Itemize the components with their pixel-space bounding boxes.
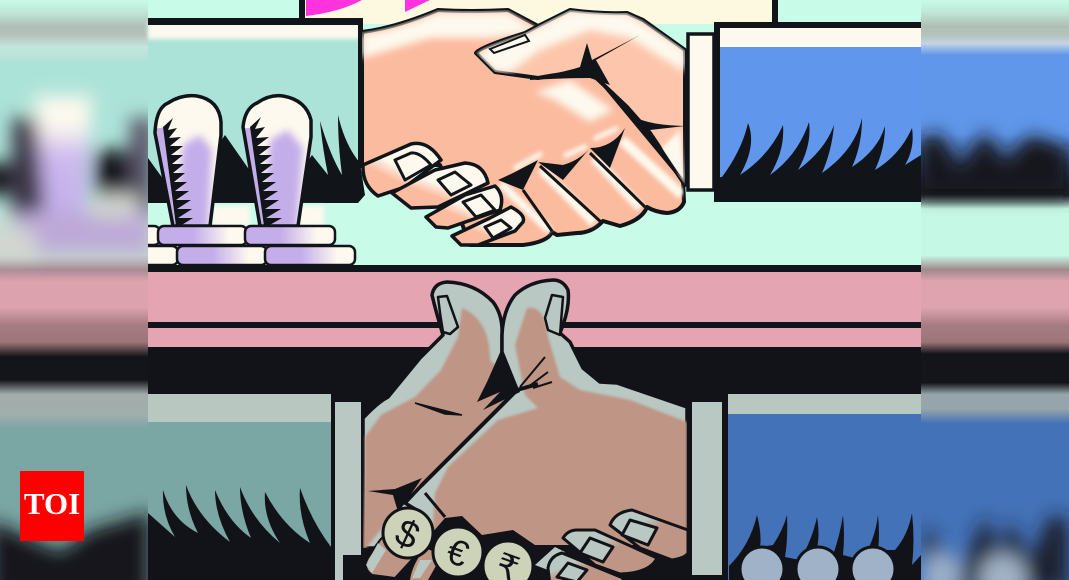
- icons: sleeve buttons: [740, 547, 895, 580]
- finger: nailed finger four: [452, 207, 524, 245]
- logo: TOI badge: [20, 471, 84, 541]
- right sleeve, upper: [714, 22, 921, 202]
- blurred right side panel: [919, 0, 1069, 580]
- stacked stamp pads: [136, 226, 355, 265]
- left hand with raised thumb: [363, 280, 505, 548]
- highlight on finger behind dollar coin: [366, 543, 386, 573]
- logo: TOI badge: TOI: [24, 486, 80, 521]
- finger: nailed finger two: [392, 163, 488, 208]
- icon: rupee coin: [483, 541, 533, 580]
- highlight on finger behind euro coin: [412, 560, 432, 578]
- right hand with raised thumb: [405, 280, 687, 550]
- dark wedge between the thumbs: [477, 348, 520, 410]
- icon: right rubber stamp: [243, 96, 311, 232]
- icon: dollar coin: $: [389, 511, 426, 558]
- icon: euro coin: €: [441, 530, 474, 575]
- right hand back and thumb: [476, 10, 685, 185]
- left sleeve, lower: [148, 394, 331, 580]
- lower handshake: [363, 280, 688, 580]
- finger: lower nailed finger two: [563, 530, 657, 574]
- icon: euro coin: [433, 527, 483, 577]
- upper handshake: [362, 10, 685, 245]
- right sleeve, lower: [728, 394, 921, 580]
- white shirt cuff, upper right: [688, 34, 714, 190]
- finger: nailed finger three: [426, 186, 502, 228]
- finger: nailed finger one: [363, 143, 441, 196]
- finger: lower nailed finger three: [548, 553, 623, 580]
- crease end beside the dollar coin: [368, 478, 422, 512]
- icon: left rubber stamp: [155, 96, 221, 232]
- icon: dollar coin: [383, 508, 433, 558]
- left hand palm and fingers: [362, 10, 684, 245]
- background mint wall: [148, 0, 921, 266]
- dark crease between the palms: [421, 384, 538, 486]
- pink table: [148, 265, 921, 348]
- finger behind euro coin: [410, 548, 442, 580]
- finger: lower nailed finger one: [610, 510, 688, 560]
- black under-table area: [148, 347, 921, 580]
- blurred left side panel: [0, 0, 154, 580]
- background poster: [299, 0, 778, 24]
- finger behind dollar coin: [366, 515, 430, 578]
- finger beside rupee coin: [535, 547, 565, 570]
- crease beside the coins: [425, 493, 445, 517]
- grey shirt cuff, lower left: [335, 402, 361, 580]
- desk strips below left sleeve: [212, 206, 324, 226]
- left sleeve, upper: [148, 18, 365, 203]
- grey shirt cuff, lower right: [692, 402, 722, 575]
